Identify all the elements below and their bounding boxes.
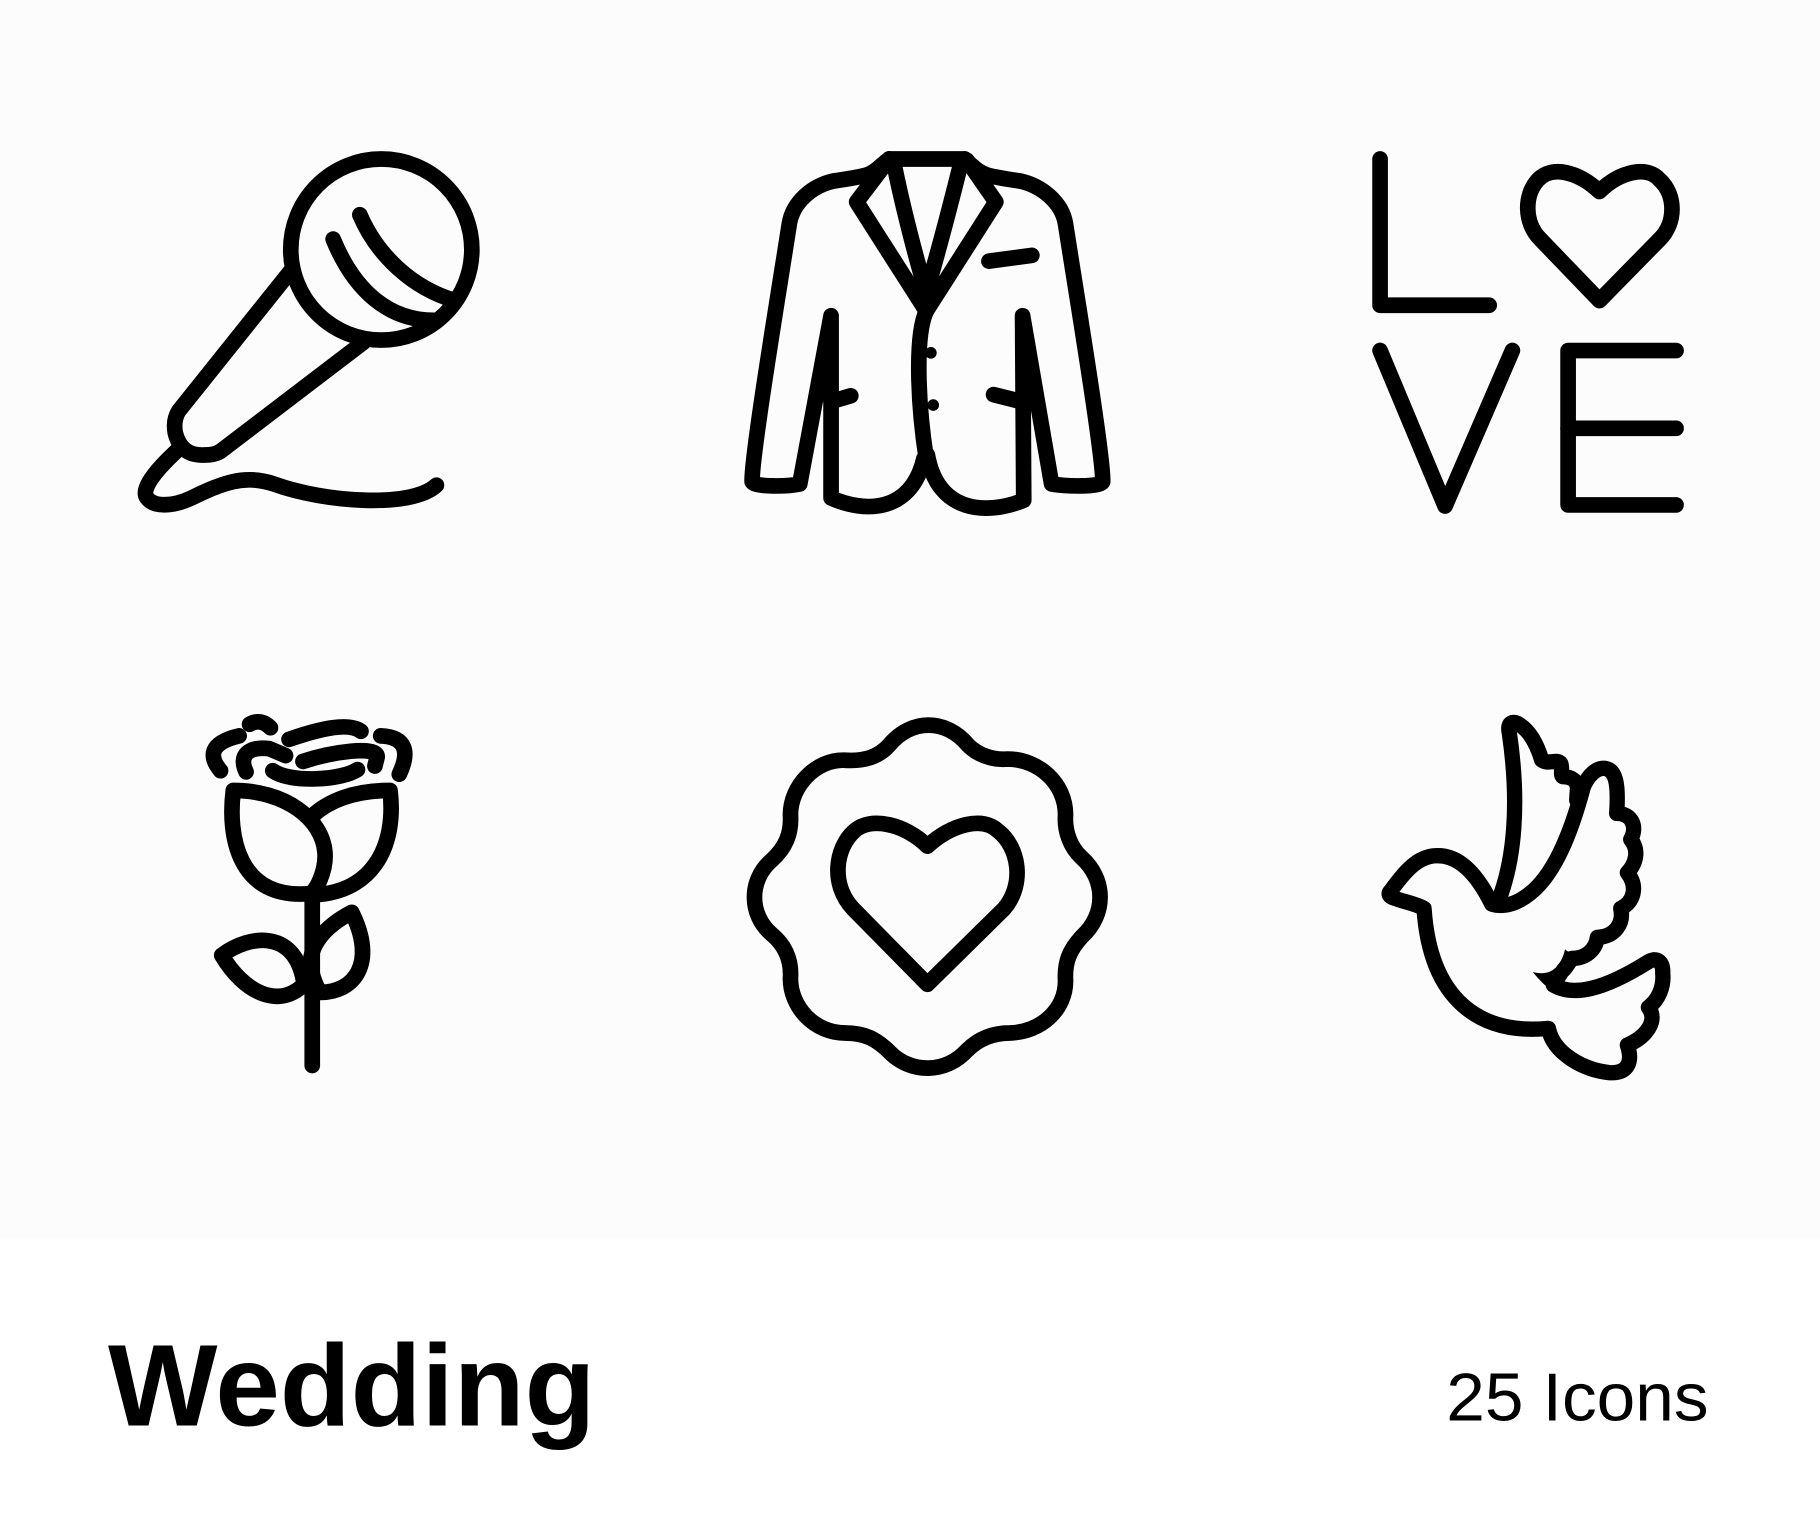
icon: rose: [213, 722, 405, 1066]
icon: love lettering: [1380, 159, 1676, 506]
icon: suit jacket: [752, 159, 1103, 508]
icon count: 25 Icons: [1446, 1361, 1709, 1436]
icon: microphone: [145, 159, 472, 505]
title: Wedding: [108, 1320, 595, 1450]
icon: dove: [1389, 722, 1663, 1073]
icon: heart badge: [754, 725, 1100, 1068]
